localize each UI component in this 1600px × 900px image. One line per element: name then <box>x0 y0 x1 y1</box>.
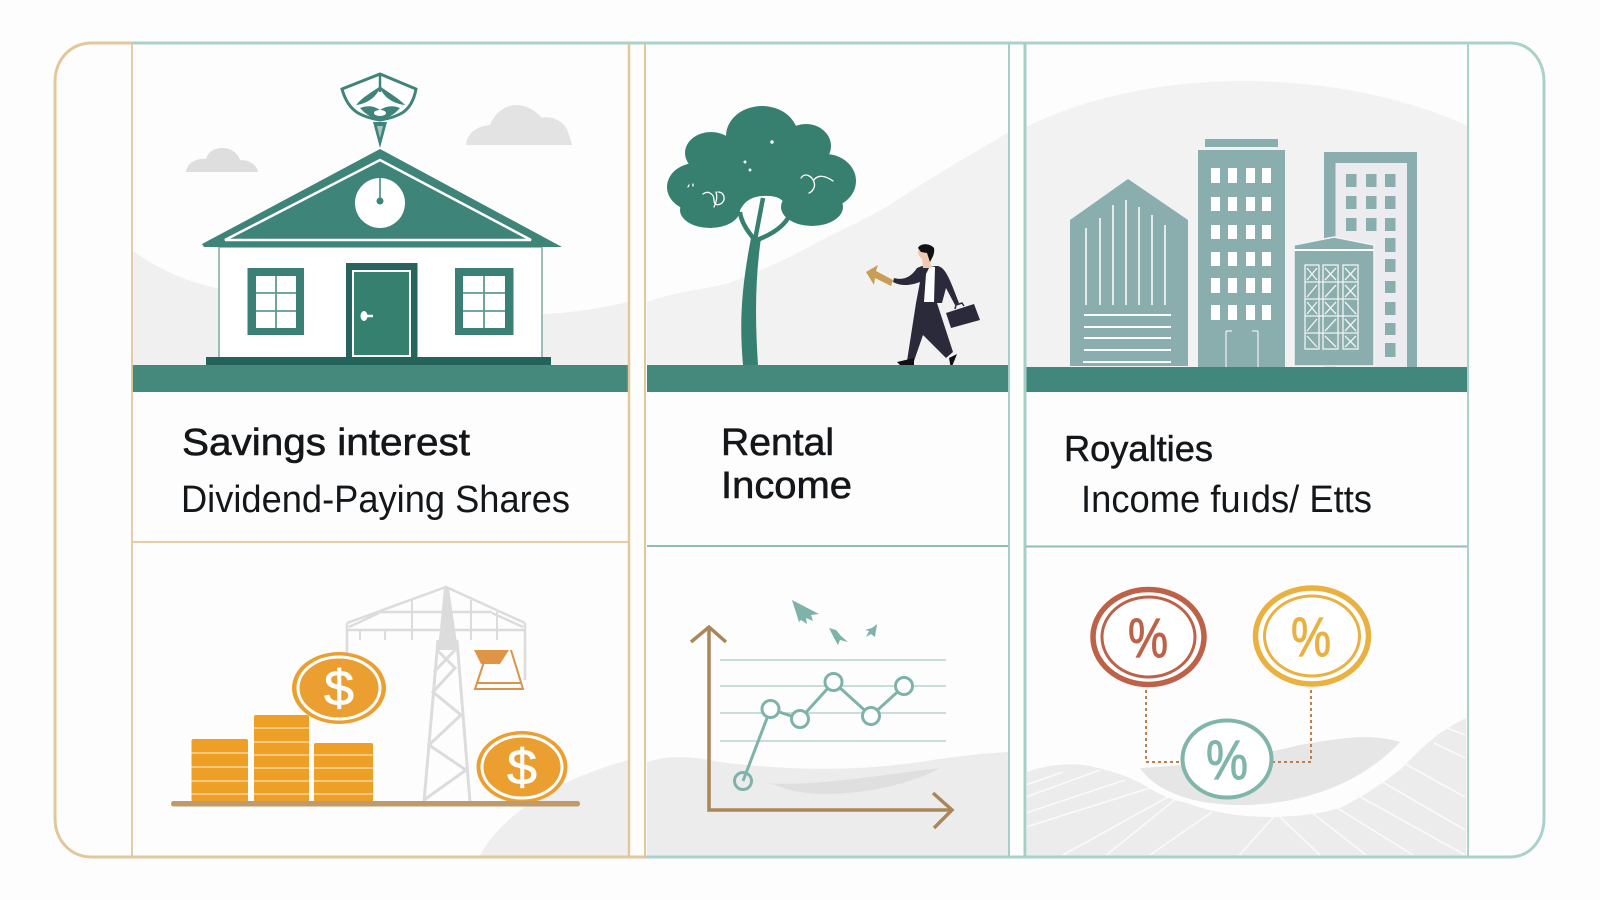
ground band <box>132 365 629 392</box>
house base <box>206 357 551 366</box>
icon: coin lower <box>476 731 568 803</box>
building: tall tower <box>1198 139 1285 367</box>
panel: growth line chart illustration <box>647 600 1009 856</box>
heading: Savings interest <box>182 422 470 464</box>
ground band <box>1026 367 1468 392</box>
icon: coin upper: $ <box>324 660 354 716</box>
subheading: Income fuıds/ Etts <box>1081 479 1372 521</box>
badge: red percent: % <box>1128 606 1168 669</box>
chart axes <box>691 627 952 828</box>
hill background <box>1026 81 1468 367</box>
heading block: savings interest <box>181 422 570 521</box>
icon: coin lower: $ <box>507 739 537 795</box>
floor bar <box>171 801 580 806</box>
icon: hanging basket <box>474 650 523 689</box>
swoosh shadow <box>768 768 940 794</box>
cloud left <box>186 148 258 172</box>
roof <box>202 149 562 247</box>
panel: percentage badges illustration <box>1026 588 1466 856</box>
panel: savings interest house illustration <box>132 74 629 392</box>
icon: gold arrow <box>866 265 893 286</box>
line chart series <box>734 674 912 790</box>
column two rules <box>644 43 646 857</box>
cloud right <box>466 105 572 145</box>
heading second line: Income <box>721 465 852 507</box>
heading: Rental <box>721 422 834 464</box>
ground band <box>647 365 1009 392</box>
icon: roof emblem <box>342 74 416 148</box>
icon: coin upper <box>292 652 386 724</box>
heading block: rental income <box>721 422 852 507</box>
chart grid lines <box>720 660 946 741</box>
dotted connectors <box>1146 690 1311 762</box>
icon: clock <box>355 178 405 228</box>
panel: rental income tree and person illustration <box>647 106 1009 392</box>
column one rules <box>132 43 629 857</box>
heading block: royalties <box>1064 428 1372 521</box>
building: low patterned block <box>1294 237 1374 366</box>
icon: tree <box>667 106 856 365</box>
hill background <box>480 760 629 856</box>
badge: yellow percent <box>1256 588 1368 684</box>
wavy ground <box>1026 718 1466 856</box>
panel: dividend shares coins illustration <box>171 587 629 856</box>
panel: royalties city buildings illustration <box>1026 81 1468 392</box>
gray ground <box>647 752 1009 856</box>
frame left tan section <box>55 43 645 857</box>
house walls <box>219 247 542 359</box>
hill background <box>132 250 629 365</box>
icon: walking businessman <box>893 244 980 369</box>
hill background <box>647 132 1009 365</box>
subheading: Dividend-Paying Shares <box>181 479 570 521</box>
badge: red percent <box>1093 590 1204 684</box>
left window <box>248 268 304 335</box>
frame right teal section <box>132 43 1544 857</box>
icon: coin stacks <box>192 715 373 802</box>
column three rules <box>1024 43 1026 857</box>
building: rear tower <box>1324 152 1417 367</box>
icon: birds <box>792 600 877 645</box>
badge: teal percent: % <box>1206 728 1248 791</box>
heading: Royalties <box>1064 428 1213 469</box>
right window <box>455 268 514 335</box>
icon: gray pylon <box>347 587 525 802</box>
building: offices with pitched top <box>1070 179 1188 366</box>
badge: yellow percent: % <box>1291 605 1331 668</box>
door <box>346 263 418 358</box>
badge: teal percent <box>1182 720 1272 798</box>
